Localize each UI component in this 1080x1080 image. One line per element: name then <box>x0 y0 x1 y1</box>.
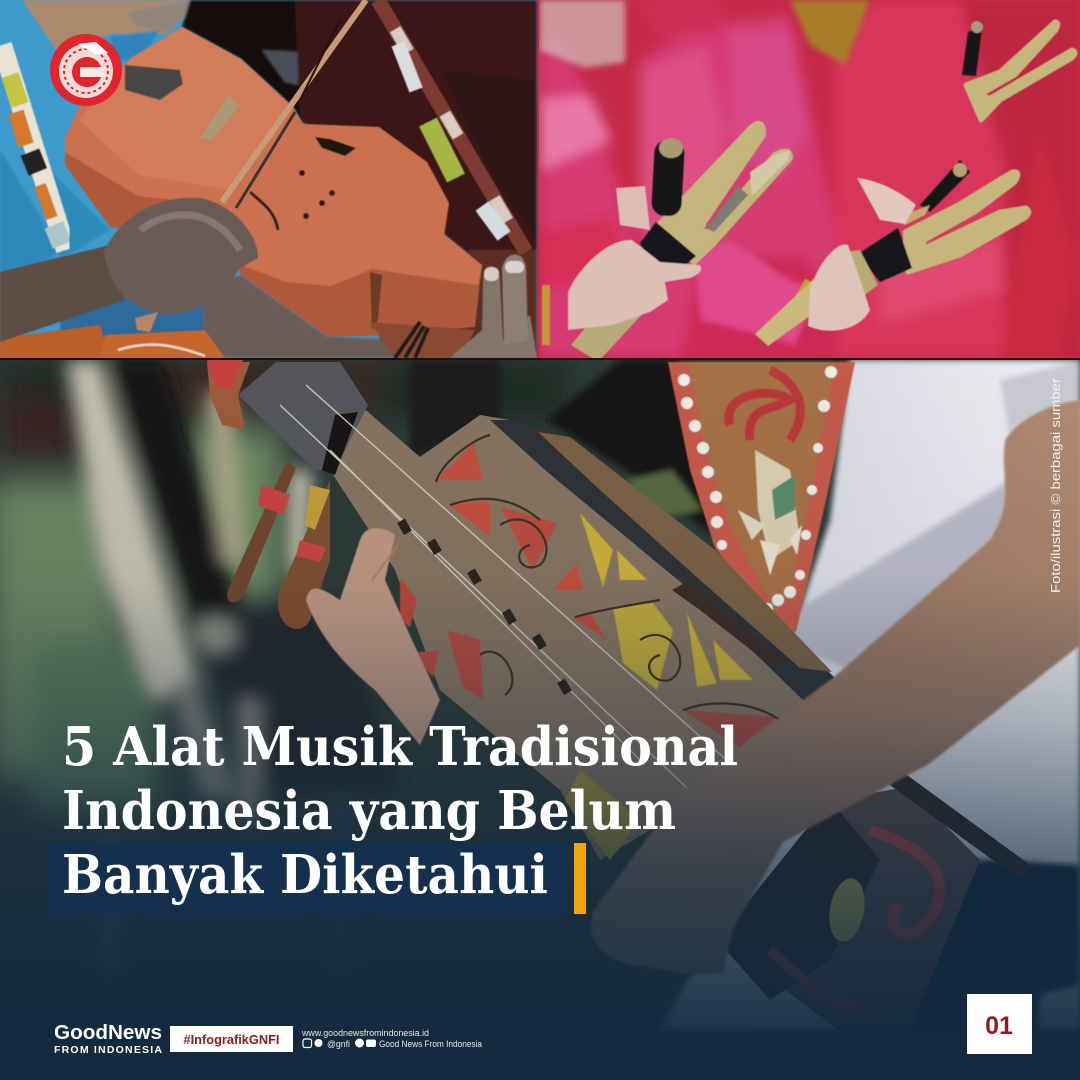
photo: rebab-style lute played by elder <box>0 0 537 358</box>
photo: pink-robed players with forked bamboo instruments <box>539 0 1080 362</box>
title <box>48 716 738 914</box>
website and social handles <box>301 1028 482 1049</box>
blurred forest backdrop <box>0 360 570 810</box>
bow <box>222 0 366 208</box>
white shirt <box>660 360 1080 1030</box>
page number <box>967 994 1032 1054</box>
instrument one <box>570 314 642 358</box>
lower instrument section <box>756 789 980 1027</box>
title: Banyak Diketahui <box>62 844 548 906</box>
icons: instagram and twitter <box>303 1039 322 1048</box>
beaded strap <box>2 45 66 250</box>
fretting hand <box>306 528 440 745</box>
dark strap lower right <box>910 856 1080 1030</box>
icons: facebook and youtube <box>355 1038 376 1048</box>
highlight bar behind third line <box>48 843 567 914</box>
instrument three <box>966 22 1075 120</box>
yellow accent bar <box>574 843 586 914</box>
brand logo text: FROM INDONESIA <box>54 1044 162 1056</box>
hashtag tag: #InfografikGNFI <box>184 1033 280 1047</box>
title: Indonesia yang Belum <box>62 780 676 842</box>
head and tuning pegs <box>238 362 368 470</box>
photo: carved sape lute with arm and pendant <box>0 360 1080 1080</box>
strings <box>280 385 760 800</box>
instrument two <box>754 278 814 346</box>
forearm and hand <box>591 400 1080 975</box>
hashtag tag <box>170 1026 293 1052</box>
carved instrument <box>207 360 1033 1070</box>
photo credit: Foto/ilustrasi © berbagai sumber <box>1049 378 1063 593</box>
website and social handles: @gnfi <box>327 1039 350 1049</box>
brand logo text <box>54 1022 162 1056</box>
hands, arm and clothes <box>0 198 537 358</box>
beaded pendant <box>668 362 855 632</box>
icon: GNFI logo badge <box>50 34 122 106</box>
vertical seam between top photos <box>537 0 539 358</box>
website and social handles: www.goodnewsfromindonesia.id <box>301 1028 429 1038</box>
embroidered band <box>378 0 526 252</box>
website and social handles: Good News From Indonesia <box>379 1039 482 1049</box>
hand one <box>568 240 701 330</box>
darkening overlay <box>0 566 1080 1080</box>
seam between photos <box>0 358 1080 360</box>
page number: 01 <box>985 1012 1013 1040</box>
trim <box>542 285 550 345</box>
title: 5 Alat Musik Tradisional <box>62 716 738 778</box>
brand logo text: GoodNews <box>54 1022 162 1044</box>
lute body <box>65 27 482 336</box>
